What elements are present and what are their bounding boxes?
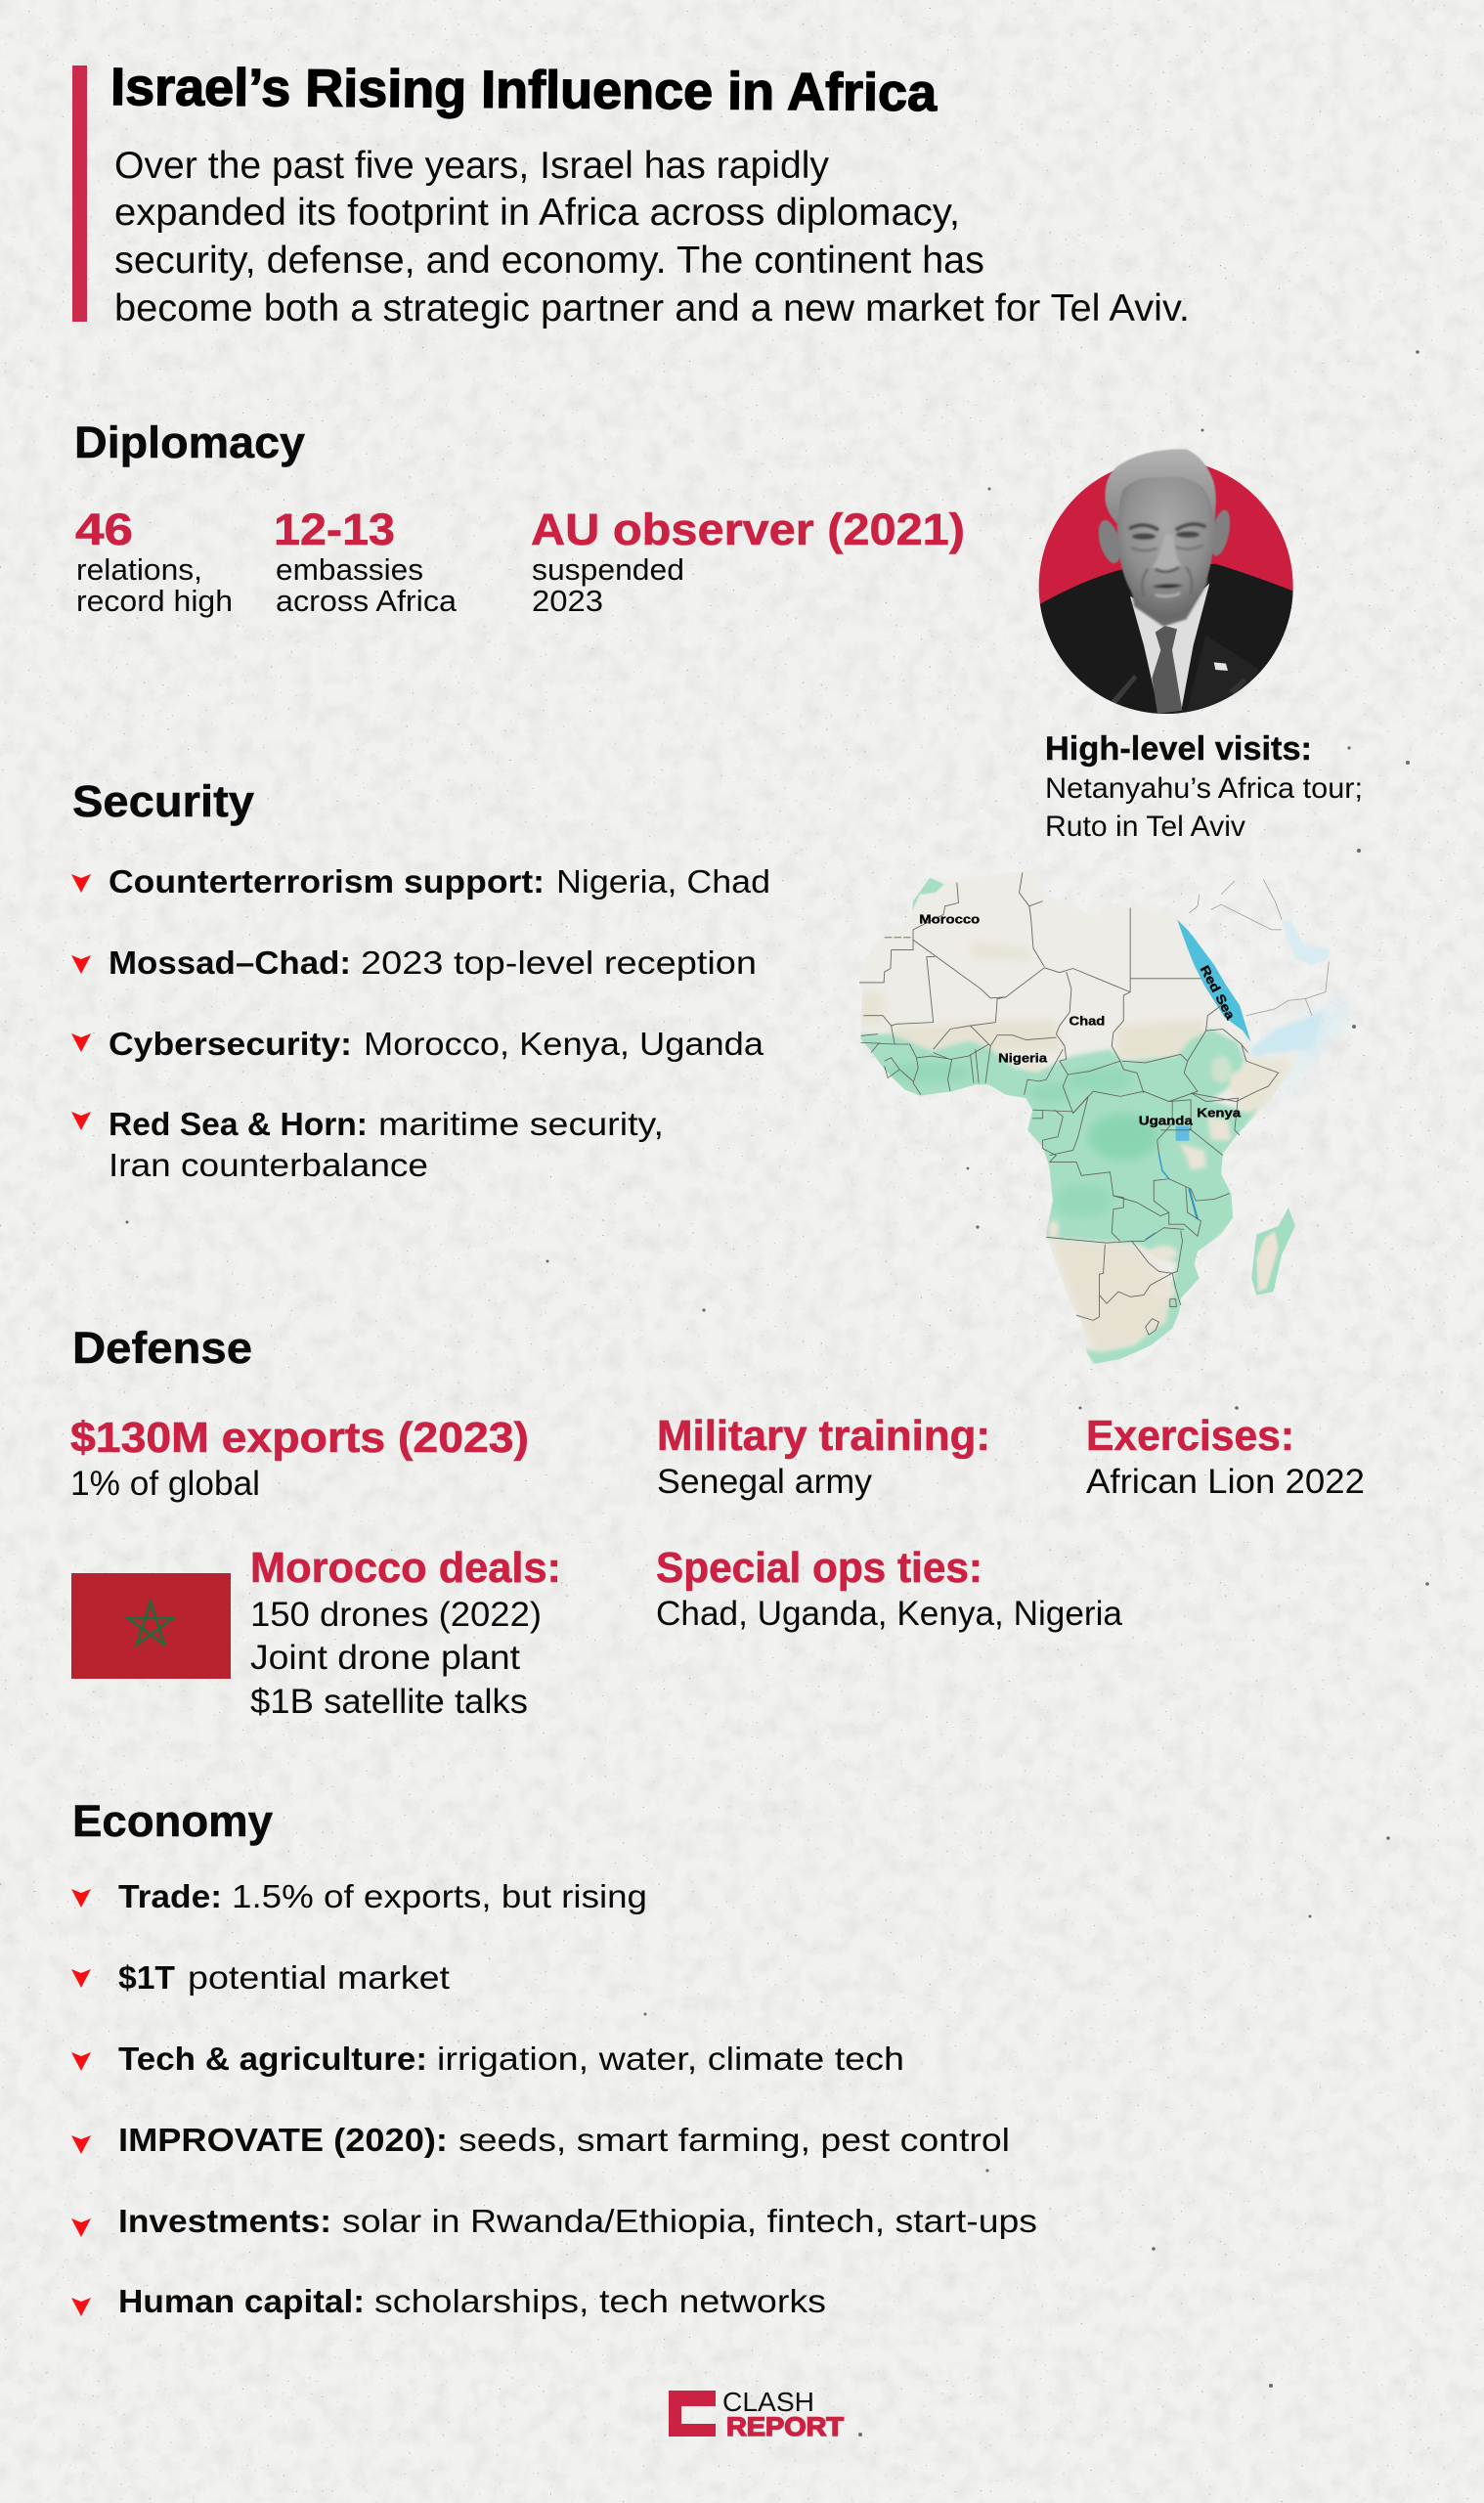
intro text: expanded its footprint in Africa across diplomacy, bbox=[114, 192, 960, 234]
country borders bbox=[859, 872, 1329, 1335]
Morocco deals: Joint drone plant bbox=[250, 1639, 520, 1677]
stat: 46 relations: record high bbox=[76, 584, 233, 618]
map labels: Chad bbox=[1069, 1013, 1105, 1028]
high-level visits note: Netanyahu’s Africa tour; bbox=[1045, 772, 1363, 805]
map labels: Kenya bbox=[1197, 1106, 1242, 1120]
panel: security bbox=[71, 776, 770, 1184]
bullet: improvate: IMPROVATE (2020): bbox=[118, 2123, 448, 2159]
intro text: Over the past five years, Israel has rapidly bbox=[114, 145, 830, 187]
north coast green bbox=[912, 878, 944, 912]
heading: defense: Defense bbox=[72, 1323, 252, 1373]
bullet: human capital: scholarships, tech networks bbox=[374, 2284, 826, 2320]
stat: exercises: African Lion 2022 bbox=[1086, 1463, 1365, 1501]
accent bar bbox=[72, 66, 87, 322]
stat: military training: Senegal army bbox=[657, 1463, 873, 1501]
special ops ties: Special ops ties: bbox=[656, 1545, 982, 1592]
heading: economy: Economy bbox=[72, 1796, 273, 1846]
neck bbox=[1131, 557, 1207, 627]
bullet: red sea bbox=[71, 1107, 664, 1184]
panel: header bbox=[72, 58, 1190, 329]
bullet: human capital: Human capital: bbox=[118, 2284, 365, 2320]
map labels bbox=[919, 912, 1242, 1128]
bullet: market: potential market bbox=[188, 1960, 451, 1997]
stat: AU observer: 2023 bbox=[532, 584, 603, 618]
stat: military training: Military training: bbox=[657, 1413, 990, 1460]
bullet: trade: Trade: bbox=[118, 1879, 222, 1915]
bullet: cybersecurity bbox=[71, 1027, 764, 1063]
heading: security: Security bbox=[72, 776, 254, 826]
stat: 46 relations bbox=[75, 505, 233, 618]
bullet: mossad bbox=[71, 945, 757, 982]
bullet: market: $1T bbox=[118, 1960, 176, 1997]
icon: Morocco flag bbox=[71, 1573, 231, 1679]
logo: Clash Report bbox=[669, 2387, 845, 2441]
bullet: tech and agriculture: Tech & agriculture: bbox=[118, 2042, 427, 2078]
Red Sea bbox=[1177, 920, 1250, 1042]
high-level visits note: High-level visits: bbox=[1045, 730, 1312, 768]
bullet: trade bbox=[71, 1879, 647, 1915]
facial features bbox=[1129, 524, 1205, 596]
map of Africa bbox=[858, 868, 1349, 1364]
stat: exports bbox=[70, 1415, 529, 1503]
bullet: human capital bbox=[71, 2284, 826, 2320]
stat: AU observer bbox=[531, 505, 965, 618]
stat: AU observer: suspended bbox=[532, 552, 684, 587]
map labels: Nigeria bbox=[998, 1050, 1048, 1065]
map labels: Uganda bbox=[1139, 1114, 1194, 1128]
bullet: red sea: maritime security, bbox=[378, 1107, 664, 1143]
intro text: security, defense, and economy. The continent has bbox=[114, 240, 984, 282]
portrait bbox=[1036, 449, 1297, 717]
bullet: market bbox=[71, 1960, 451, 1997]
green belt bbox=[841, 1030, 1258, 1369]
Madagascar bbox=[1251, 1208, 1295, 1295]
logo: Clash Report: REPORT bbox=[726, 2412, 845, 2441]
stat: 46 relations: relations, bbox=[76, 552, 202, 587]
Arabian waters bbox=[1282, 920, 1329, 965]
bullet: mossad: Mossad–Chad: bbox=[109, 945, 351, 982]
stat: military training bbox=[657, 1413, 990, 1501]
lakes and rivers bbox=[1146, 1126, 1198, 1240]
Morocco deals: Morocco deals: bbox=[250, 1545, 561, 1592]
stat: AU observer: AU observer (2021) bbox=[531, 505, 965, 554]
stat: exports: $130M exports (2023) bbox=[70, 1415, 529, 1462]
high-level visits note bbox=[1045, 730, 1363, 843]
bullet: investments bbox=[71, 2204, 1037, 2240]
title: Israel’s Rising Influence in Africa bbox=[110, 58, 938, 122]
stat: 46 relations: 46 bbox=[75, 505, 133, 554]
stat: 12-13 embassies: embassies bbox=[276, 552, 423, 587]
bullet: tech and agriculture: irrigation, water, climate tech bbox=[437, 2042, 904, 2078]
soft water halos bbox=[1275, 995, 1349, 1100]
panel: economy bbox=[71, 1796, 1037, 2320]
special ops ties: Chad, Uganda, Kenya, Nigeria bbox=[656, 1595, 1123, 1633]
Morocco deals: $1B satellite talks bbox=[250, 1683, 528, 1721]
bullet: cybersecurity: Morocco, Kenya, Uganda bbox=[364, 1027, 764, 1063]
stat: exercises bbox=[1086, 1413, 1365, 1501]
intro text: become both a strategic partner and a new market for Tel Aviv. bbox=[114, 287, 1190, 329]
map labels: Morocco bbox=[919, 912, 980, 927]
map labels: Red Sea bbox=[1198, 963, 1239, 1023]
bullet: red sea: Iran counterbalance bbox=[109, 1148, 428, 1184]
bullet: counterterrorism bbox=[71, 864, 770, 900]
bullet: trade: 1.5% of exports, but rising bbox=[232, 1879, 647, 1915]
face bbox=[1117, 474, 1215, 618]
stat: 12-13 embassies: 12-13 bbox=[274, 505, 395, 554]
logo: Clash Report: CLASH bbox=[722, 2387, 814, 2417]
gulf of Aden bbox=[1249, 1009, 1326, 1058]
high-level visits note: Ruto in Tel Aviv bbox=[1045, 811, 1245, 843]
special ops ties bbox=[656, 1545, 1123, 1633]
stat: exercises: Exercises: bbox=[1086, 1413, 1294, 1460]
bullet: investments: Investments: bbox=[118, 2204, 331, 2240]
stat: exports: 1% of global bbox=[70, 1465, 260, 1503]
hair bbox=[1105, 449, 1216, 525]
ears bbox=[1094, 508, 1234, 565]
bullet: counterterrorism: Nigeria, Chad bbox=[556, 864, 770, 900]
heading: diplomacy: Diplomacy bbox=[74, 417, 305, 467]
intro text bbox=[114, 145, 1190, 329]
bullet: counterterrorism: Counterterrorism support: bbox=[109, 864, 545, 900]
bullet: improvate: seeds, smart farming, pest control bbox=[458, 2123, 1010, 2159]
bullet: investments: solar in Rwanda/Ethiopia, fintech, start-ups bbox=[342, 2204, 1037, 2240]
stat: 12-13 embassies bbox=[274, 505, 458, 618]
panel: defense bbox=[70, 1323, 1365, 1721]
panel: diplomacy bbox=[74, 417, 965, 618]
Morocco deals bbox=[250, 1545, 561, 1721]
bullet: red sea: Red Sea & Horn: bbox=[109, 1107, 368, 1143]
bullet: cybersecurity: Cybersecurity: bbox=[109, 1027, 352, 1063]
bullet: tech and agriculture bbox=[71, 2042, 904, 2078]
stat: 12-13 embassies: across Africa bbox=[276, 584, 458, 618]
Morocco deals: 150 drones (2022) bbox=[250, 1596, 542, 1634]
bullet: improvate bbox=[71, 2123, 1010, 2159]
bullet: mossad: 2023 top-level reception bbox=[361, 945, 757, 982]
